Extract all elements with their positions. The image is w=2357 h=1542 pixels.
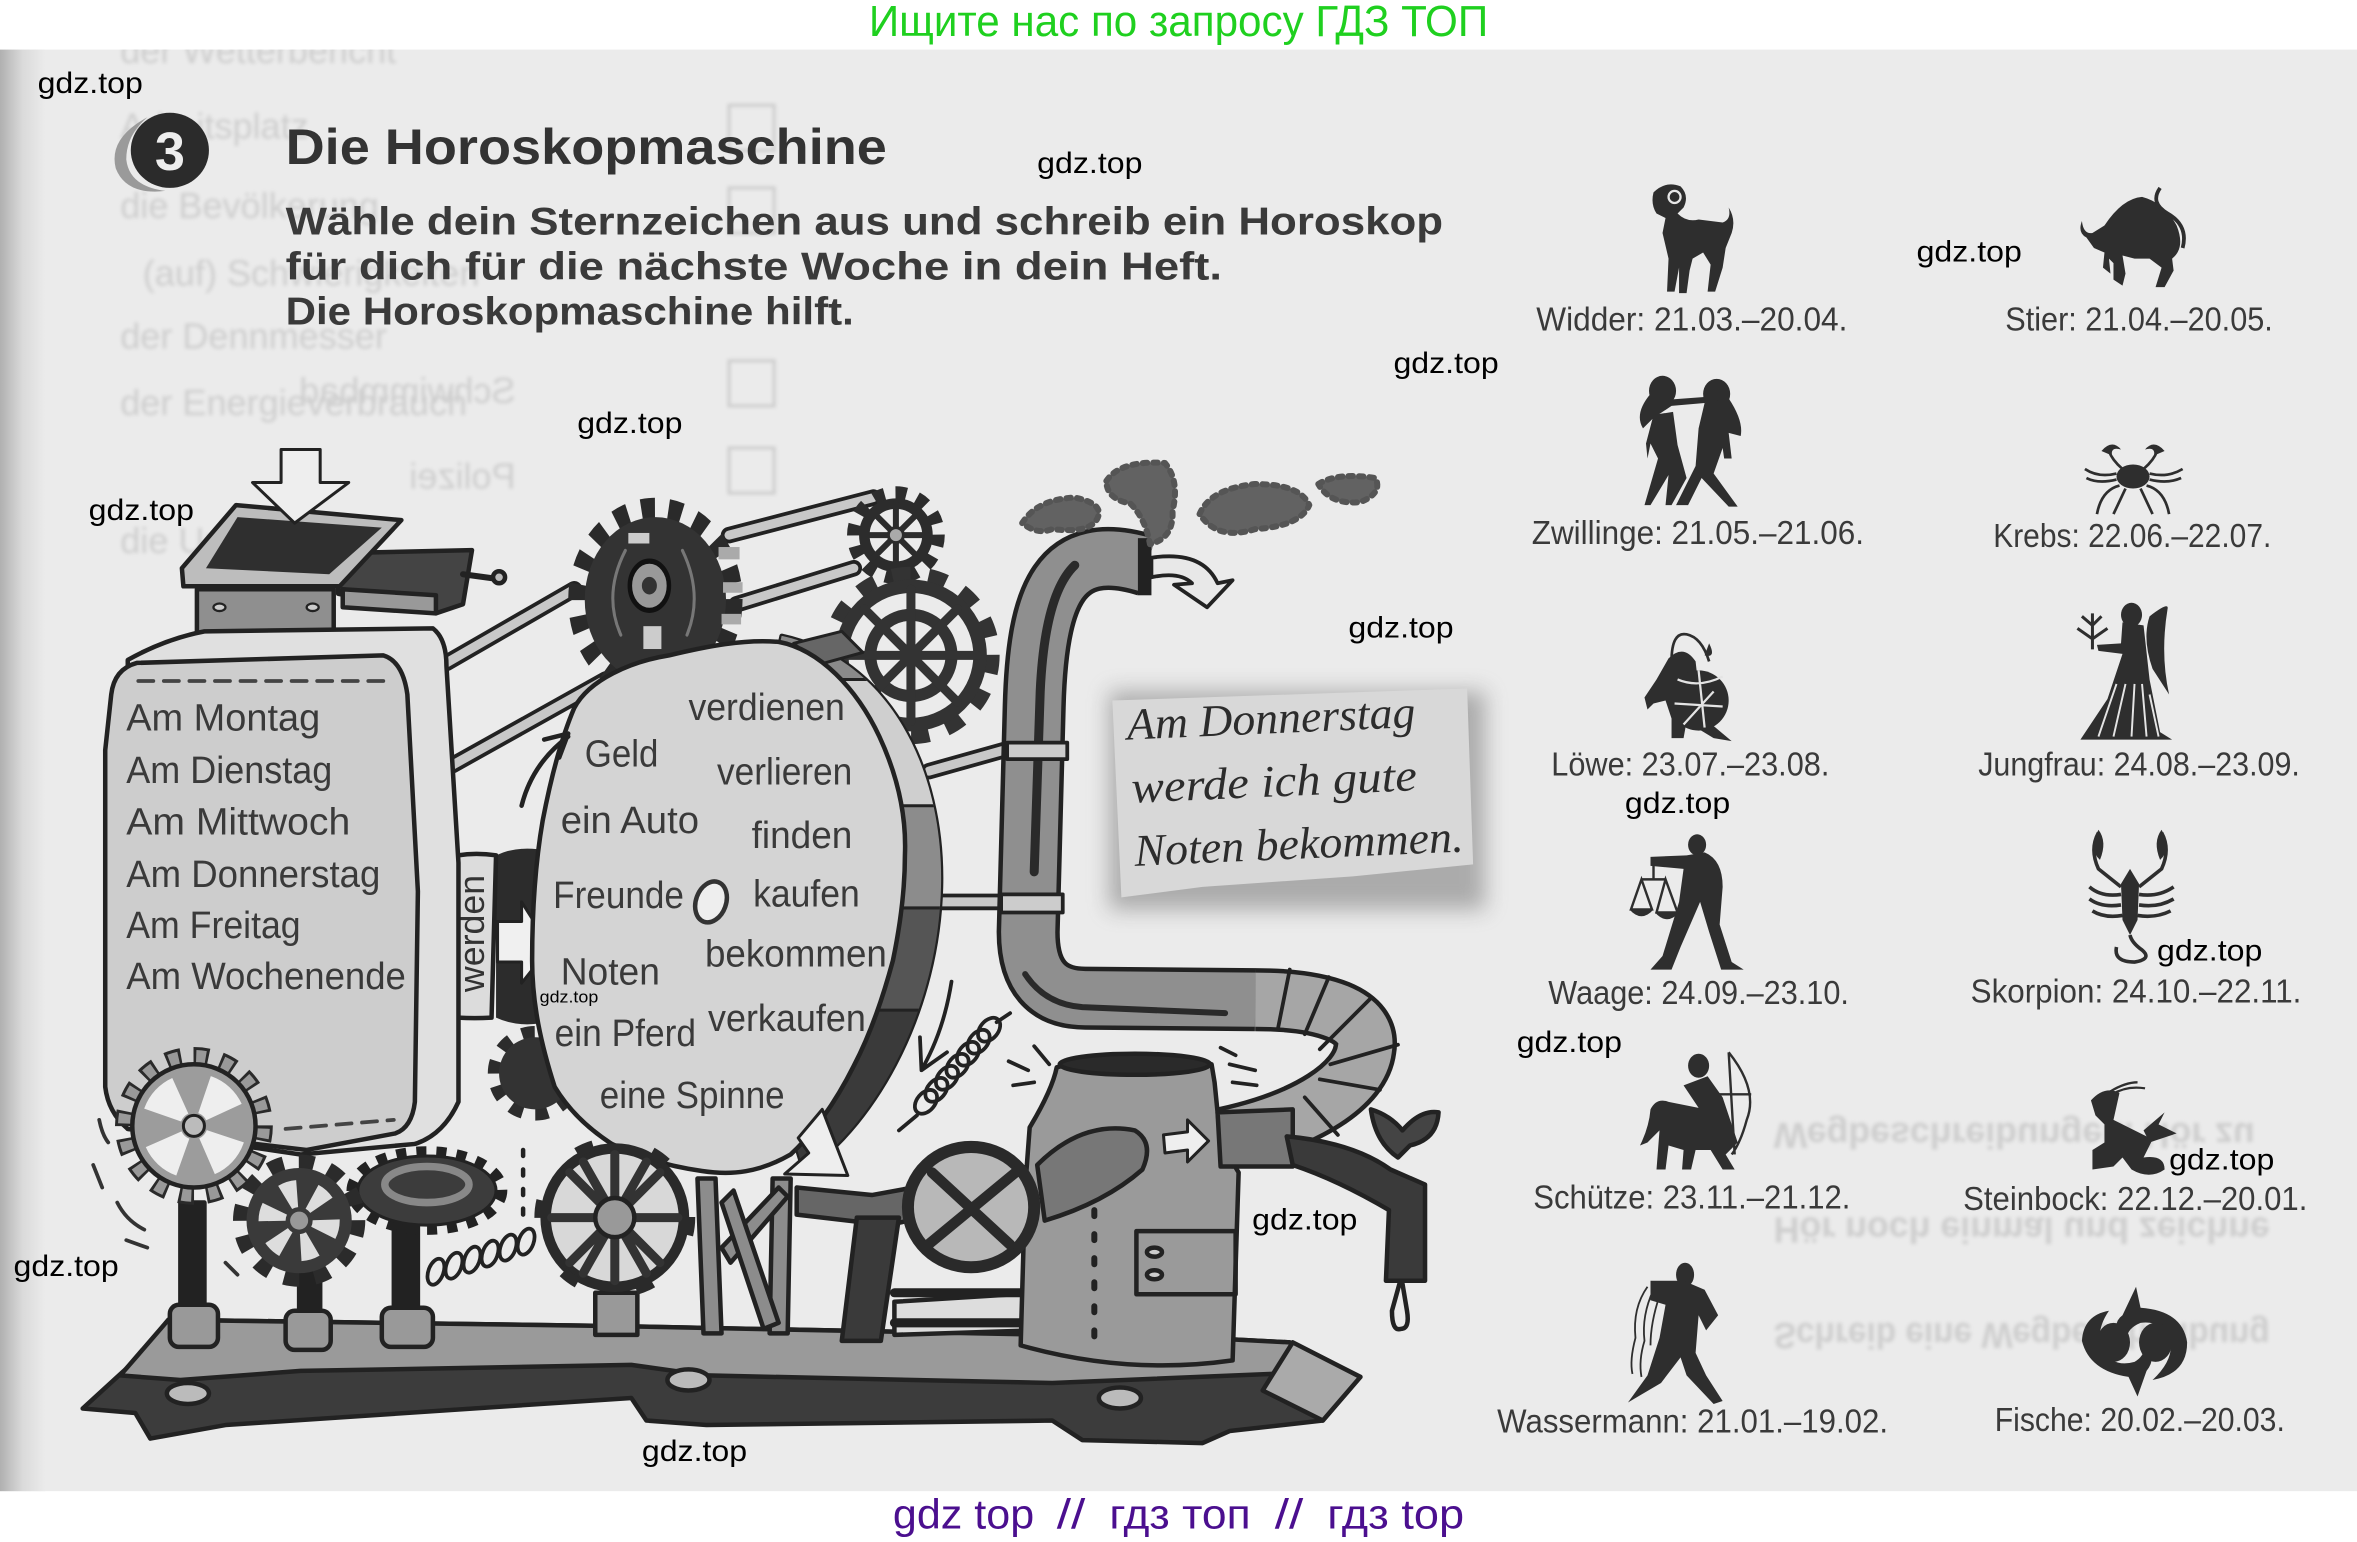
watermarks: gdz.top — [577, 407, 682, 440]
show-through text from reverse page: Hör noch einmal und zeichne — [1774, 1210, 2270, 1251]
label: Krebs: Krebs: 22.06.–22.07. — [1993, 518, 2271, 555]
watermarks: gdz.top — [642, 1435, 747, 1468]
tank with day list: Am Freitag — [126, 904, 301, 946]
example note card: werde ich gute — [1130, 750, 1418, 813]
drum with word list: Freunde — [553, 874, 684, 916]
tank with day list — [105, 628, 458, 1154]
spoked wheel — [540, 1142, 690, 1335]
connector with werden label — [440, 849, 547, 1024]
arrow: drum rotation — [522, 734, 568, 806]
example note card: Noten bekommen. — [1132, 812, 1464, 876]
exhaust arrow — [1151, 556, 1233, 607]
icon: gemini — [1640, 376, 1741, 507]
watermarks: gdz.top — [1348, 611, 1454, 644]
drum with word list: ein Auto — [561, 799, 699, 841]
icon: virgo — [2077, 603, 2172, 740]
watermarks: gdz.top — [14, 1250, 119, 1283]
arrow into drum — [498, 902, 550, 983]
accordion pipe — [1218, 970, 1398, 1166]
icon: sagittarius — [1640, 1052, 1751, 1169]
smoke clouds — [1022, 463, 1377, 544]
label: Löwe: Löwe: 23.07.–23.08. — [1551, 747, 1829, 784]
axle and support — [797, 1165, 1037, 1341]
exercise number badge — [115, 113, 209, 192]
icon: crab — [2085, 445, 2183, 514]
exhaust pipe — [1025, 558, 1255, 1013]
motion marks at furnace — [1009, 1046, 1257, 1085]
label: Fische: Fische: 20.02.–20.03. — [1995, 1402, 2285, 1439]
drum with word list: finden — [752, 814, 852, 856]
title: Die Horoskopmaschine — [286, 119, 887, 175]
drum with word list: Geld — [585, 733, 658, 775]
drum with word list: verlieren — [717, 751, 852, 793]
watermarks: gdz.top — [1393, 347, 1499, 380]
show-through text from reverse page — [120, 30, 2270, 1356]
label: Jungfrau: Jungfrau: 24.08.–23.09. — [1978, 747, 2300, 784]
label: Skorpion: Skorpion: 24.10.–22.11. — [1971, 974, 2301, 1011]
label: Wassermann: Wassermann: 21.01.–19.02. — [1497, 1404, 1888, 1441]
gear: dark top — [579, 510, 743, 689]
dark gear bottom — [241, 1162, 358, 1279]
gear: small top right — [855, 495, 936, 576]
show-through text from reverse page: der Dennmesser — [120, 316, 387, 357]
spring to pipe — [899, 1013, 1010, 1130]
furnace — [1021, 1054, 1239, 1365]
label: Widder: Widder: 21.03.–20.04. — [1536, 302, 1847, 339]
example note card: Am Donnerstag — [1123, 687, 1416, 750]
drum with word list: bekommen — [705, 933, 887, 975]
werden label: werden — [451, 875, 492, 993]
show-through text from reverse page: Schreib eine Wegbeschreibung — [1774, 1315, 2270, 1356]
zodiac panel — [1497, 184, 2307, 1441]
icon: libra — [1629, 834, 1744, 970]
icon: ram — [1653, 184, 1733, 293]
flat gear — [353, 1153, 501, 1228]
drum with word list: verkaufen — [708, 997, 866, 1039]
motion marks at light gear — [93, 1120, 238, 1275]
show-through text from reverse page: Schwimmbad — [299, 370, 516, 411]
footer links: // — [1275, 1491, 1304, 1538]
gear: large right — [831, 576, 991, 735]
base plate — [83, 1320, 1360, 1443]
drum with word list: verdienen — [688, 686, 845, 728]
tank with day list: Am Montag — [126, 697, 320, 739]
gear: dark left of drum — [495, 1033, 576, 1114]
valve wheel — [908, 1147, 1034, 1267]
drum with word list: Noten — [561, 951, 660, 993]
footer links: гдз top — [1327, 1491, 1464, 1538]
watermarks: gdz.top — [38, 67, 143, 100]
show-through text from reverse page: (auf) Schwierigkeiten — [143, 253, 480, 294]
label: Steinbock: Steinbock: 22.12.–20.01. — [1963, 1181, 2307, 1218]
drum rim — [778, 630, 944, 1160]
tank with day list: Am Mittwoch — [126, 800, 350, 842]
watermarks: gdz.top — [1917, 236, 2022, 269]
spring left — [424, 1226, 538, 1287]
label: Stier: Stier: 21.04.–20.05. — [2005, 302, 2273, 339]
watermarks: gdz.top — [2157, 935, 2262, 968]
footer links — [893, 1491, 1464, 1538]
hanging crank — [1287, 1109, 1439, 1329]
exercise number badge: 3 — [155, 122, 185, 182]
wooden trestle — [697, 1179, 791, 1333]
instruction text: Wähle dein Sternzeichen aus und schreib ein Horoskop — [286, 201, 1443, 244]
instruction text — [286, 201, 1443, 334]
small arrow on furnace — [1163, 1120, 1209, 1162]
show-through text from reverse page: Wegbeschreibungen. Hör zu — [1774, 1115, 2255, 1156]
watermarks: gdz.top — [540, 988, 598, 1007]
pipe clamps — [1001, 743, 1067, 912]
label: Zwillinge: Zwillinge: 21.05.–21.06. — [1532, 515, 1864, 552]
drum with word list: ein Pferd — [555, 1012, 696, 1054]
hopper with input arrow — [182, 449, 505, 634]
tank with day list: Am Donnerstag — [126, 853, 380, 895]
watermarks: gdz.top — [1625, 787, 1730, 820]
tank with day list: Am Wochenende — [126, 955, 406, 997]
watermarks: gdz.top — [1517, 1026, 1622, 1059]
instruction text: für dich für die nächste Woche in dein Heft. — [286, 246, 1222, 289]
light gear — [125, 1057, 263, 1195]
posts and cylinders — [170, 1203, 433, 1350]
example note card — [1109, 687, 1485, 909]
icon: aquarius — [1628, 1263, 1723, 1404]
show-through text from reverse page: der Energieverbrauch — [120, 382, 467, 423]
pipe mouth — [1138, 538, 1151, 595]
horoscope machine illustration — [83, 449, 1439, 1443]
label: Waage: Waage: 24.09.–23.10. — [1548, 975, 1849, 1012]
drum with word list: kaufen — [753, 872, 860, 914]
tank with day list: Am Dienstag — [126, 749, 332, 791]
show-through text from reverse page: die Umwelt — [120, 520, 299, 561]
watermarks: gdz.top — [1037, 147, 1142, 180]
icon: pisces — [2082, 1287, 2187, 1396]
footer links: // — [1057, 1491, 1086, 1538]
watermarks: gdz.top — [1252, 1204, 1357, 1237]
footer links: гдз топ — [1109, 1491, 1251, 1538]
white arrow at drum bottom — [785, 1109, 848, 1176]
arrow: thin down — [920, 982, 952, 1070]
instruction text: Die Horoskopmaschine hilft. — [286, 291, 854, 334]
drum with word list — [532, 641, 905, 1173]
icon: capricorn — [2091, 1082, 2177, 1175]
drum with word list: eine Spinne — [600, 1074, 785, 1116]
show-through text from reverse page: Arbeitsplatz — [120, 105, 309, 146]
drive rods — [446, 498, 1004, 902]
drum centre hub — [690, 877, 732, 927]
show-through text from reverse page: Polizei — [409, 456, 516, 497]
icon: bull — [2080, 188, 2184, 287]
footer links: gdz top — [893, 1491, 1034, 1538]
label: Schutze: Schütze: 23.11.–21.12. — [1533, 1180, 1850, 1217]
icon: lion — [1644, 634, 1732, 741]
show-through text from reverse page: der Wetterbericht — [120, 30, 396, 71]
watermarks: gdz.top — [2169, 1143, 2274, 1176]
furnace nozzle — [1037, 1128, 1147, 1221]
dotted motion marks — [522, 1150, 525, 1225]
watermarks: gdz.top — [89, 494, 194, 527]
show-through text from reverse page: die Bevölkerung — [120, 185, 379, 226]
icon: scorpion — [2089, 830, 2174, 962]
